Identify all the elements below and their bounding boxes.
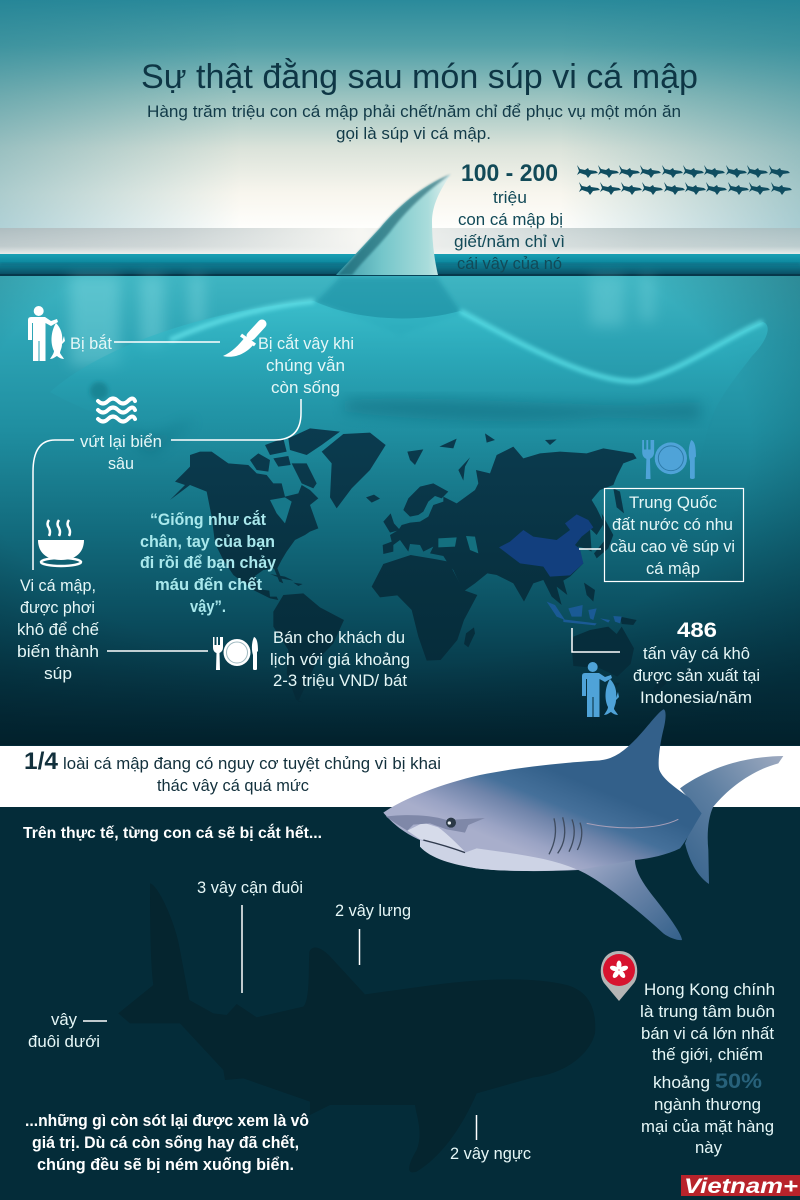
fin labels bbox=[28, 879, 531, 1163]
map: China highlighted bbox=[499, 514, 593, 577]
icon: white cutlery bbox=[213, 637, 258, 670]
connector lines bbox=[33, 342, 620, 1140]
world map bbox=[170, 428, 667, 703]
Australia bbox=[572, 627, 634, 677]
statement: one quarter of species: thác vây cá quá mức bbox=[157, 777, 309, 795]
background: sky edge shading bbox=[0, 0, 800, 228]
icon: blue cutlery bbox=[642, 440, 696, 479]
step: thrown back: sâu bbox=[108, 455, 134, 473]
stat: 100-200 million sharks: con cá mập bị bbox=[458, 211, 563, 229]
icon: Hong Kong map pin bbox=[601, 951, 637, 1001]
fin labels: 2 vây ngực bbox=[450, 1145, 531, 1163]
shark back highlight left bbox=[170, 301, 314, 340]
text: Hong Kong: này bbox=[695, 1139, 723, 1157]
Kamchatka bbox=[613, 488, 624, 513]
text: what remains: chúng đều sẽ bị ném xuống biển. bbox=[37, 1156, 294, 1174]
step: thrown back: vứt lại biển bbox=[80, 433, 162, 451]
step: thrown back bbox=[80, 433, 162, 473]
Scandinavia bbox=[403, 483, 448, 517]
quote: vậy”. bbox=[190, 598, 226, 616]
UK bbox=[383, 513, 400, 533]
mouth bbox=[423, 840, 465, 853]
icon: man with fish bbox=[28, 306, 65, 361]
shark back highlight right bbox=[460, 311, 763, 381]
shark mouth shadow bbox=[120, 420, 195, 455]
Caspian Sea bbox=[466, 536, 478, 553]
body bbox=[383, 709, 702, 871]
step: sold to tourists: Bán cho khách du bbox=[273, 629, 405, 647]
subtitle: Hàng trăm triệu con cá mập phải chết/năm chỉ để phục vụ một món ăn bbox=[147, 103, 681, 121]
text: Hong Kong: bán vi cá lớn nhất bbox=[641, 1025, 774, 1043]
Arctic Russia islands bbox=[407, 433, 557, 481]
step: fins cut bbox=[258, 334, 354, 397]
icon: knife bbox=[223, 324, 262, 357]
Africa bbox=[372, 555, 477, 661]
icon: soup bowl bbox=[38, 520, 84, 566]
belly bbox=[420, 840, 577, 871]
quote: máu đến chết bbox=[155, 576, 263, 594]
Japan bbox=[594, 513, 613, 558]
map: Eurasia, Oceania bbox=[383, 433, 667, 693]
Hudson Bay bbox=[270, 497, 292, 523]
fin labels: 2 vây lưng bbox=[335, 902, 411, 920]
icon: rows of small sharks bbox=[577, 165, 792, 195]
statement: one quarter of species: 1/4 bbox=[24, 748, 59, 775]
step: dried shark fin: Vi cá mập, bbox=[20, 577, 96, 595]
text: Hong Kong: là trung tâm buôn bbox=[640, 1003, 775, 1021]
text: Hong Kong: 50% bbox=[715, 1070, 762, 1093]
Madagascar bbox=[464, 627, 475, 647]
stat: 100-200 million sharks: 100 - 200 bbox=[461, 160, 558, 187]
Caribbean bbox=[270, 574, 303, 586]
map: Indonesia highlighted bbox=[547, 602, 622, 625]
step: sold to tourists bbox=[270, 629, 410, 690]
dark shark silhouette with cut fins bbox=[118, 883, 595, 1172]
step: dried shark fin: khô để chế bbox=[17, 621, 99, 639]
logo: Vietnam+: Vietnam+ bbox=[684, 1175, 798, 1198]
shark belly shadow bbox=[345, 399, 700, 421]
dorsal fin above water bbox=[336, 174, 451, 275]
heading: fins cut: Trên thực tế, từng con cá sẽ bị cắt hết... bbox=[23, 823, 322, 842]
step: sold to tourists: 2-3 triệu VND/ bát bbox=[273, 672, 407, 690]
step: dried shark fin: được phơi bbox=[20, 599, 95, 617]
step: sold to tourists: lịch với giá khoảng bbox=[270, 651, 410, 669]
step: dried shark fin: súp bbox=[44, 665, 72, 683]
shark eye bbox=[90, 382, 108, 400]
South America bbox=[273, 593, 344, 703]
icon: blue man with fish bbox=[582, 662, 619, 717]
stat: 486 tonnes: 486 bbox=[677, 619, 717, 642]
text: Hong Kong bbox=[640, 981, 775, 1157]
callout: China: cầu cao về súp vi bbox=[610, 538, 735, 556]
upper jaw bbox=[407, 823, 465, 852]
white band bbox=[0, 746, 800, 807]
text: Hong Kong: mại của mặt hàng bbox=[641, 1118, 774, 1136]
North America bbox=[170, 452, 318, 600]
step: dried shark fin bbox=[17, 577, 99, 683]
callout: China: đất nước có nhu bbox=[612, 516, 733, 534]
fin labels: 3 vây cận đuôi bbox=[197, 879, 303, 897]
text: what remains: giá trị. Dù cá còn sống hay đã chết, bbox=[32, 1134, 299, 1152]
statement: one quarter of species bbox=[24, 748, 441, 795]
text: Hong Kong: Hong Kong chính bbox=[644, 981, 775, 999]
Black Sea bbox=[438, 537, 457, 547]
large shark illustration bbox=[383, 709, 783, 940]
stat: 486 tonnes bbox=[633, 619, 760, 707]
step: dried shark fin: biến thành bbox=[17, 643, 99, 661]
text: Hong Kong: ngành thương bbox=[654, 1096, 761, 1114]
callout: China: cá mập bbox=[646, 560, 700, 578]
Tasmania bbox=[613, 683, 620, 687]
eye bbox=[446, 818, 456, 828]
text: what remains: ...những gì còn sót lại được xem là vô bbox=[25, 1112, 309, 1130]
tail bbox=[680, 756, 783, 884]
title: Sự thật đằng sau món súp vi cá mập bbox=[141, 58, 698, 96]
pectoral fin bbox=[578, 853, 682, 940]
stat: 100-200 million sharks bbox=[454, 160, 565, 273]
background: horizon haze bbox=[0, 228, 800, 256]
statement: one quarter of species: loài cá mập đang có nguy cơ tuyệt chủng vì bị khai bbox=[63, 755, 441, 773]
stat: 100-200 million sharks: giết/năm chỉ vì bbox=[454, 233, 565, 251]
Arctic islands bbox=[250, 428, 340, 488]
background: underwater bbox=[0, 276, 800, 745]
Philippines bbox=[584, 583, 595, 602]
icon: waves bbox=[98, 398, 135, 422]
shark body bbox=[50, 301, 768, 480]
lateral line bbox=[587, 819, 678, 828]
eye mask bbox=[386, 815, 485, 833]
underwater shark silhouette bbox=[50, 277, 768, 480]
gills bbox=[549, 817, 582, 854]
subtitle: gọi là súp vi cá mập. bbox=[336, 125, 491, 143]
fin labels: vây bbox=[51, 1011, 78, 1029]
Iceland bbox=[366, 495, 380, 503]
text: Hong Kong: khoảng bbox=[653, 1074, 710, 1092]
stat: 100-200 million sharks: cái vây của nó bbox=[457, 255, 562, 273]
quote bbox=[140, 510, 277, 616]
Papua bbox=[620, 617, 637, 625]
New Zealand bbox=[653, 678, 667, 693]
stat: 486 tonnes: được sản xuất tại bbox=[633, 667, 760, 685]
bottom dark panel bbox=[0, 807, 800, 1200]
map: Americas, Greenland, Africa bbox=[170, 428, 477, 703]
step: fins cut: Bị cắt vây khi bbox=[258, 334, 354, 353]
stat: 486 tonnes: Indonesia/năm bbox=[640, 689, 752, 707]
quote: “Giống như cắt bbox=[150, 510, 266, 529]
text: what remains bbox=[25, 1112, 309, 1174]
background: sea surface band bbox=[0, 254, 800, 276]
submerged fin bbox=[316, 277, 462, 335]
quote: đi rồi để bạn chảy bbox=[140, 554, 277, 572]
stat: 100-200 million sharks: triệu bbox=[493, 189, 527, 207]
text: Hong Kong: thế giới, chiếm bbox=[652, 1046, 763, 1064]
Eurasia bbox=[383, 447, 637, 605]
callout: China: Trung Quốc bbox=[629, 494, 717, 512]
subtitle bbox=[147, 103, 681, 143]
stat: 486 tonnes: tấn vây cá khô bbox=[643, 645, 750, 663]
fin labels: đuôi dưới bbox=[28, 1033, 100, 1051]
step: fins cut: chúng vẫn bbox=[266, 356, 345, 375]
Greenland bbox=[322, 433, 386, 508]
step: caught: Bị bắt bbox=[70, 334, 112, 353]
callout: China bbox=[604, 488, 744, 582]
step: fins cut: còn sống bbox=[271, 379, 340, 397]
background: sky bbox=[0, 0, 800, 228]
quote: chân, tay của bạn bbox=[140, 533, 275, 551]
